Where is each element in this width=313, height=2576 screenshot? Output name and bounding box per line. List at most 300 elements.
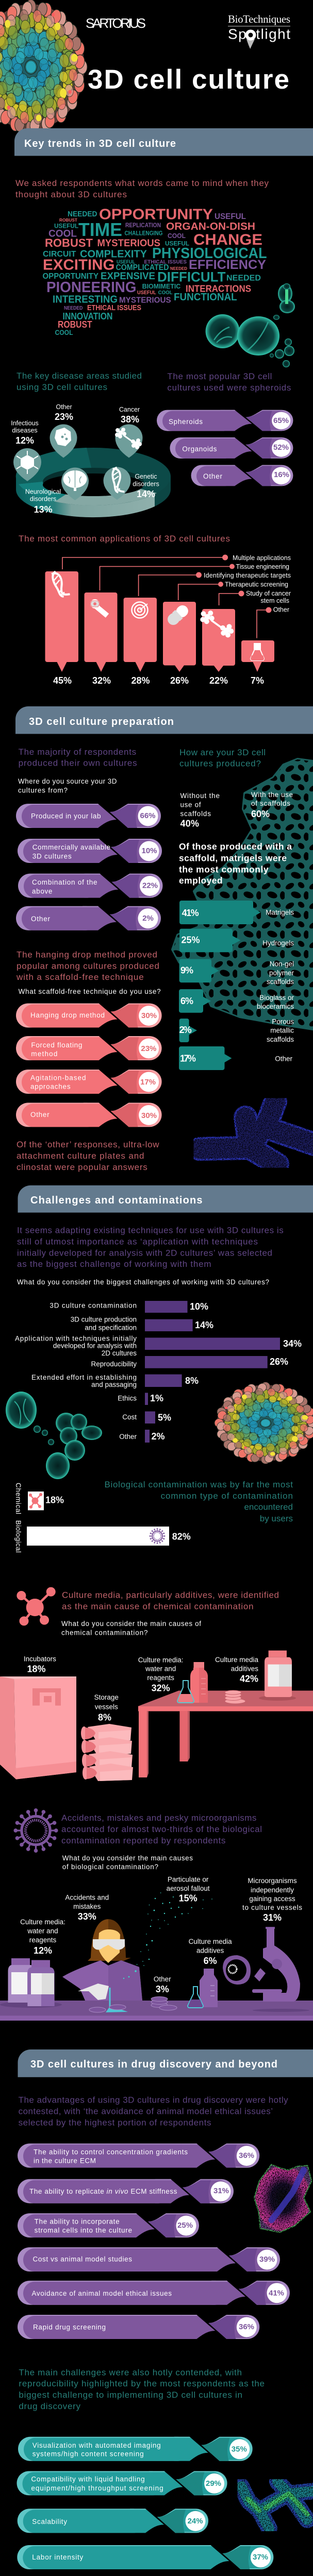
labels: chemical causes: Culture media (215, 1656, 258, 1664)
chart: scaffold materials: scaffolds (267, 1036, 294, 1043)
labels: biological causes: reagents (29, 1936, 57, 1944)
text: without scaffolds: 40% (180, 818, 199, 828)
callout: matrigels (179, 841, 292, 886)
chart: scaffold materials: bioceramics (257, 1003, 294, 1010)
labels: biological causes: Other (154, 1975, 171, 1983)
question: biological causes: What do you consider the main causes (62, 1854, 193, 1862)
chart: scaffold materials: 6% (180, 996, 193, 1006)
labels: 14% (137, 489, 155, 499)
pin: other (50, 425, 77, 457)
bench (138, 1691, 313, 1777)
icon: cancer cells (200, 611, 234, 638)
chart: applications bars: Therapeutic screening (225, 581, 288, 588)
bottle: water and reagents (190, 1662, 208, 1703)
chart: challenges bars: 1% (150, 1393, 163, 1403)
image: teal bubbles left (6, 1392, 102, 1479)
labels: chemical causes: Incubators (24, 1655, 56, 1663)
image: multicoloured spheroid 2 (206, 1375, 313, 1471)
icon: target (132, 602, 147, 618)
labels: biological causes: to culture vessels (242, 1904, 302, 1911)
ribbon: ethical issues: Avoidance of animal model ethical issues (32, 2290, 172, 2297)
section header: drug discovery (18, 2049, 313, 2077)
labels: biological causes: mistakes (73, 1903, 101, 1910)
ribbon: labor: Labor intensity (32, 2553, 84, 2561)
heading: chemical contamination (62, 1590, 279, 1612)
labels: biological causes: additives (196, 1946, 224, 1954)
incubator (0, 1676, 76, 1780)
word cloud: ETHICAL ISSUES (87, 304, 141, 312)
ribbon: hanging drop: Hanging drop method (30, 1011, 105, 1019)
chart: applications bars (45, 554, 291, 686)
heading: biological contamination: by users (260, 1514, 293, 1523)
word cloud (42, 206, 267, 336)
word cloud: CIRCUIT (43, 250, 76, 259)
word cloud: USEFUL (165, 240, 189, 247)
petri dishes (225, 1690, 245, 1704)
word cloud: ETHICAL ISSUES (144, 260, 187, 265)
ribbon: compatibility: 29% (206, 2479, 221, 2488)
word cloud: DIFFICULT (157, 269, 226, 285)
chart: challenges bars: 10% (190, 1301, 208, 1312)
text: other responses: attachment culture plates and (17, 1151, 144, 1161)
text: other responses (17, 1140, 159, 1172)
ribbon: stromal cells: 25% (177, 2221, 193, 2230)
ribbon: concentration gradients: in the culture ECM (34, 2157, 96, 2164)
word cloud: USEFUL (54, 223, 78, 230)
heading: biological causes (61, 1813, 262, 1845)
chart: scaffold materials: 2% (179, 1025, 192, 1035)
word cloud: ROBUST (58, 319, 92, 330)
ribbon: other technique (16, 1103, 162, 1127)
chart: scaffold materials: Matrigels (266, 909, 294, 917)
labels: biological causes: 31% (263, 1912, 282, 1923)
labels: biological causes: Culture media (189, 1938, 232, 1945)
text: other responses: clinostat were popular answers (17, 1162, 147, 1172)
chart: applications bars: Multiple applications (233, 554, 291, 562)
word cloud: REPLICATION (125, 223, 161, 229)
word cloud: INTERESTING (53, 294, 118, 305)
ribbon: forced floating (16, 1036, 162, 1060)
labels: chemical causes: 42% (240, 1674, 258, 1684)
text: without scaffolds: Without the (180, 792, 220, 800)
ribbon: cost (18, 2247, 280, 2272)
chart: scaffold materials: Other (275, 1055, 293, 1063)
word cloud: ROBUST (45, 236, 93, 249)
chart: challenges bars: 2% (152, 1431, 165, 1442)
word cloud: CHANGE (193, 231, 262, 248)
labels: 38% (121, 414, 139, 425)
word cloud: CHALLENGING (125, 230, 163, 236)
chart: challenges bars (15, 1301, 302, 1443)
heading: own cultures (19, 747, 137, 768)
microscope (252, 1927, 309, 2012)
image: blue-green organoid (241, 2482, 313, 2529)
heading: chemical contamination: Culture media, particularly additives, were identified (62, 1590, 279, 1600)
heading: own cultures: produced their own cultures (19, 758, 137, 768)
chart: applications bars: Other (273, 606, 289, 614)
logo: Sartorius: SARTORIUS (86, 15, 146, 31)
heading: own cultures: The majority of respondents (19, 747, 136, 757)
labels: chemical causes (24, 1655, 258, 1722)
labels: chemical causes: Storage (94, 1693, 119, 1701)
text: without scaffolds: scaffolds (180, 810, 211, 818)
ribbon: labor: 37% (253, 2553, 268, 2562)
question: chemical causes (61, 1620, 201, 1636)
ribbon: agitation: Agitation-based (30, 1074, 86, 1082)
paragraph: main challenges: The main challenges were also hotly contended, with (19, 2368, 242, 2377)
heading: disease areas: The key disease areas studied (17, 371, 142, 381)
pin: genetic disorders (103, 466, 133, 500)
paragraph: advantages: contested, with ‘the avoidance of animal model ethical issues’ (19, 2107, 273, 2116)
image: teal scaffold (173, 759, 313, 1029)
labels: 12% (15, 435, 34, 446)
labels: Genetic (135, 473, 157, 480)
icon: dna (45, 570, 76, 599)
labels: biological causes: 3% (156, 1984, 169, 1994)
callout: matrigels: Of those produced with a (179, 841, 292, 852)
section header: challenges (18, 1185, 313, 1213)
word cloud: MYSTERIOUS (97, 238, 160, 249)
ribbon: combination: Combination of the (32, 878, 97, 886)
chart: scaffold materials: Non-gel (270, 960, 294, 968)
text: without scaffolds (180, 792, 220, 828)
chart: challenges bars: Ethics (118, 1394, 137, 1402)
labels: biological causes (20, 1876, 302, 1994)
paragraph: main challenges: biggest challenge to implementing 3D cell cultures in (19, 2390, 242, 2400)
ribbon: stromal cells (18, 2213, 199, 2238)
intro text: word cloud: We asked respondents what words came to mind when they (15, 178, 269, 188)
ribbon: produced in lab: Produced in your lab (31, 812, 101, 820)
chart: scaffold materials: Hydrogels (262, 939, 294, 947)
heading: hanging drop: with a scaffold-free technique (16, 972, 144, 982)
paragraph: adapting techniques: It seems adapting existing techniques for use with 3D cultures is (17, 1226, 284, 1235)
word cloud: COMPLICATED (116, 263, 169, 272)
chart: scaffold materials: 25% (182, 935, 200, 945)
chart: challenges bars: 2D cultures (102, 1349, 137, 1357)
chart: disease areas ring with pins (11, 403, 171, 517)
ribbon: ECM stiffness (18, 2179, 234, 2204)
paragraph: advantages (19, 2095, 288, 2127)
heading: hanging drop: The hanging drop method proved (17, 950, 157, 960)
word cloud: USEFUL (117, 260, 135, 265)
ribbon: commercially available: 3D cultures (32, 852, 72, 860)
word cloud: TIME (78, 219, 122, 240)
callout: matrigels: scaffold, matrigels were (179, 853, 287, 863)
bottle and flask (188, 1969, 218, 2008)
chart: contamination type (14, 1483, 191, 1553)
word cloud: INTERACTIONS (186, 283, 251, 294)
section header: key trends: Key trends in 3D cell culture (24, 138, 176, 149)
word cloud: EXCITING (43, 257, 114, 273)
chart: challenges bars: 5% (158, 1413, 171, 1423)
chart: scaffold materials: 17% (180, 1053, 196, 1063)
word cloud: EXPENSIVE (101, 271, 155, 282)
chart: challenges bars: Extended effort in establishing (31, 1374, 137, 1381)
ribbon: forced floating: Forced floating (31, 1041, 82, 1049)
word cloud: OPPORTUNITY (99, 206, 213, 223)
pin: infectious diseases (13, 448, 41, 481)
contaminant particles (123, 1892, 212, 1979)
heading: biological contamination (104, 1480, 293, 1523)
labels: biological causes: 15% (179, 1893, 197, 1903)
ribbon: commercially available (18, 839, 162, 863)
word cloud: PHYSIOLOGICAL (152, 245, 267, 262)
ribbon: ECM stiffness: The ability to replicate in vivo ECM stiffness (29, 2188, 177, 2195)
labels: chemical causes: 32% (152, 1683, 170, 1693)
icon: pill (166, 603, 190, 628)
chart: applications bars: 26% (170, 675, 189, 686)
bottle: additives (259, 1651, 296, 1701)
chart: applications bars: 7% (251, 675, 264, 686)
labels: biological causes: gaining access (249, 1895, 295, 1903)
petri dishes (89, 1997, 177, 2012)
ribbon: forced floating: method (31, 1050, 57, 1058)
section header: preparation (15, 706, 313, 734)
chart: challenges bars: Application with techniques initially (15, 1335, 137, 1343)
word cloud: USEFUL (137, 290, 156, 296)
word cloud: EFFICIENCY (189, 258, 266, 272)
chart: applications bars: 28% (131, 675, 150, 686)
question: chemical causes: chemical contamination? (61, 1629, 147, 1636)
ribbon: scalability: Scalability (32, 2518, 67, 2526)
heading: how produced: How are your 3D cell (179, 748, 266, 757)
chart: scaffold materials: Porous (272, 1018, 294, 1025)
ribbon: produced in lab: 66% (140, 811, 156, 820)
ribbon: stromal cells: The ability to incorporate (35, 2218, 120, 2226)
chart: applications bars: 22% (209, 675, 228, 686)
labels: 23% (55, 412, 73, 422)
chart: applications bars: stem cells (260, 597, 289, 604)
ribbon: agitation: approaches (30, 1083, 71, 1091)
labels: biological causes: aerosol fallout (167, 1885, 210, 1892)
heading: biological causes: contamination reported by respondents (61, 1836, 225, 1845)
ribbon: scalability: 24% (188, 2517, 203, 2526)
question: source (18, 777, 117, 794)
word cloud: INNOVATION (63, 311, 112, 321)
leader lines (62, 557, 269, 638)
chart: scaffold materials (179, 901, 294, 1070)
ribbon: commercially available: Commercially available (32, 843, 110, 851)
ribbon: produced in lab (16, 804, 161, 828)
pin: neurological disorders (61, 468, 89, 500)
ribbon: cost: Cost vs animal model studies (33, 2256, 132, 2263)
chart: challenges bars: developed for analysis with (53, 1342, 137, 1350)
heading: biological contamination: common type of contamination (161, 1491, 293, 1501)
paragraph: main challenges: reproducibility highlighted by the most respondents as the (19, 2379, 265, 2388)
callout: matrigels: employed (179, 875, 223, 886)
ribbon: labor (17, 2545, 273, 2569)
heading: spheroids (167, 371, 291, 393)
labels: biological causes: 33% (78, 1911, 96, 1922)
labels: chemical causes: vessels (95, 1703, 118, 1710)
heading: disease areas: using 3D cell cultures (17, 382, 107, 392)
word cloud: NEEDED (68, 210, 97, 218)
ribbon: hanging drop (16, 1004, 162, 1027)
ribbon: visualization: Visualization with automated imaging (32, 2442, 161, 2449)
ribbon: organoids: 52% (273, 443, 289, 452)
logo: BioTechniques Spotlight: BioTechniques (228, 13, 290, 25)
ribbon: other: 16% (274, 470, 289, 479)
labels: biological causes: Accidents and (65, 1894, 109, 1902)
illustration: chemical lab scene (0, 1651, 313, 1781)
chart: challenges bars: and passaging (91, 1381, 137, 1388)
word cloud: NEEDED (64, 306, 83, 311)
labels: biological causes: Particulate or (168, 1876, 209, 1884)
labels: chemical causes: 8% (98, 1712, 111, 1722)
ribbon: compatibility (17, 2471, 227, 2495)
illustration: biological lab scene (0, 1892, 313, 2021)
ribbon: spheroids: 65% (273, 416, 289, 425)
paragraph: advantages: The advantages of using 3D cultures in drug discovery were hotly (19, 2095, 288, 2105)
heading: biological contamination: Biological contamination was by far the most (104, 1480, 293, 1489)
labels: diseases (12, 427, 38, 434)
bench (0, 2001, 313, 2021)
image: teal organoid bubbles (206, 283, 295, 367)
word cloud: NEEDED (170, 266, 187, 271)
chart: applications bars: Identifying therapeutic targets (204, 572, 291, 579)
text: with scaffolds (251, 791, 293, 819)
text: without scaffolds: use of (180, 801, 201, 809)
ribbon: organoids: Organoids (182, 445, 217, 453)
labels: biological causes: Microorganisms (248, 1877, 297, 1885)
chart: applications bars: 32% (92, 675, 111, 686)
word cloud: COOL (168, 232, 186, 240)
labels (11, 403, 159, 515)
ribbon: visualization: systems/high content screening (32, 2450, 144, 2458)
chart: challenges bars: 14% (195, 1320, 213, 1330)
chart: challenges bars: Reproducibility (91, 1360, 137, 1368)
ribbon: concentration gradients: 36% (239, 2151, 254, 2160)
chart: applications bars: Study of cancer (246, 590, 291, 597)
chart: scaffold materials: scaffolds (267, 978, 294, 986)
title: 3D cell culture (88, 64, 289, 95)
icon: wrench (90, 599, 107, 616)
text: with scaffolds: With the use (251, 791, 293, 799)
logo: BioTechniques Spotlight (228, 13, 290, 49)
heading: spheroids: cultures used were spheroids (167, 383, 291, 393)
ribbon: combination: 22% (142, 882, 158, 890)
chart: challenges bars: 26% (270, 1357, 288, 1367)
ribbon: scalability (18, 2509, 208, 2533)
section header: challenges: Challenges and contaminations (30, 1195, 202, 1206)
word cloud: OPPORTUNITY (42, 272, 99, 281)
paragraph: advantages: selected by the highest portion of respondents (19, 2117, 211, 2127)
bottles (0, 1958, 62, 2008)
heading: disease areas (17, 371, 142, 392)
ribbon: stromal cells: stromal cells into the culture (35, 2226, 132, 2234)
labels: disorders (133, 481, 159, 488)
chart: scaffold materials: 41% (182, 908, 199, 918)
labels: Cancer (119, 406, 140, 413)
labels: Infectious (11, 419, 39, 427)
word cloud: COOL (55, 329, 73, 336)
question: chemical causes: What do you consider the main causes of (61, 1620, 201, 1628)
ribbon: compatibility: Compatibility with liquid handling (31, 2476, 145, 2483)
chart: challenges bars: 3D culture production (71, 1316, 137, 1323)
word cloud: NEEDED (226, 274, 261, 282)
section header: key trends (14, 128, 313, 156)
labels: Neurological (25, 488, 61, 496)
ribbon: visualization: 35% (232, 2445, 247, 2453)
ribbon: other technique: 30% (141, 1111, 157, 1120)
intro text: word cloud: thought about 3D cultures (15, 190, 127, 199)
ribbon: concentration gradients (18, 2143, 259, 2168)
logo: BioTechniques Spotlight: Spotlight (228, 26, 290, 42)
paragraph: main challenges: drug discovery (19, 2401, 80, 2411)
heading: spheroids: The most popular 3D cell (167, 371, 272, 381)
ribbon: spheroids (157, 410, 293, 431)
chart: scaffold materials: polymer (269, 969, 294, 977)
ribbon: agitation: 17% (140, 1078, 156, 1087)
pin: cancer (115, 425, 142, 457)
question: biological causes (62, 1854, 193, 1871)
chart: contamination type: 18% (45, 1495, 64, 1505)
icon: virus (13, 1808, 58, 1853)
callout: matrigels: the most commonly (179, 865, 269, 875)
heading: how produced (179, 748, 266, 769)
chart: applications bars: Tissue engineering (236, 563, 289, 570)
heading: biological causes: accounted for almost two-thirds of the biological (61, 1824, 262, 1834)
intro text: word cloud (15, 178, 269, 199)
ribbon: organoids (170, 437, 293, 459)
heading: hanging drop (16, 950, 159, 982)
labels: biological causes: independently (251, 1886, 294, 1894)
ribbon: commercially available: 10% (141, 846, 157, 855)
chart: challenges bars: 3D culture contamination (50, 1301, 137, 1310)
ribbon: rapid screening: 36% (239, 2323, 254, 2331)
text: with scaffolds: of scaffolds (251, 800, 290, 807)
chart: scaffold materials: 9% (180, 965, 193, 976)
paragraph: adapting techniques: as the biggest challenge of working with them (17, 1259, 211, 1269)
chart: scaffold materials: Bioglass or (259, 994, 294, 1002)
word cloud: USEFUL (215, 212, 246, 221)
word cloud: COOL (48, 229, 77, 239)
chart: contamination type: 82% (172, 1531, 191, 1541)
question: biological causes: of biological contamination? (62, 1863, 158, 1871)
chart: challenges bars: 8% (185, 1376, 199, 1386)
labels: biological causes: water and (27, 1927, 58, 1935)
labels: biological causes: Culture media: (20, 1918, 65, 1926)
ribbon: compatibility: equipment/high throughput screening (31, 2484, 163, 2492)
ribbon: cost: 39% (259, 2255, 275, 2264)
section header: drug discovery: 3D cell cultures in drug discovery and beyond (30, 2059, 277, 2070)
word cloud: ROBUST (59, 217, 78, 223)
ribbon: rapid screening: Rapid drug screening (33, 2324, 106, 2331)
image: blue organoid (200, 1101, 313, 1164)
ribbon: ECM stiffness: 31% (213, 2187, 229, 2195)
heading: hanging drop: popular among cultures produced (17, 961, 159, 971)
labels: 13% (34, 504, 53, 515)
word cloud: MYSTERIOUS (119, 296, 171, 305)
ribbon: concentration gradients: The ability to control concentration gradients (34, 2148, 188, 2156)
ribbon: other (191, 465, 293, 486)
storage flasks (81, 1724, 133, 1781)
paragraph: adapting techniques: still of utmost importance as ‘application with techniques (17, 1236, 258, 1246)
question: scaffold-free: What scaffold-free technique do you use? (19, 988, 161, 995)
labels: chemical causes: 18% (27, 1664, 46, 1674)
heading: applications: The most common applications of 3D cell cultures (19, 534, 230, 544)
ribbon: combination: above (32, 887, 52, 895)
ribbon: ethical issues: 41% (269, 2289, 284, 2297)
ribbon: visualization (18, 2437, 253, 2461)
flask (177, 1681, 194, 1703)
ribbon: other source (16, 906, 161, 930)
chart: challenges bars: Cost (122, 1413, 137, 1421)
ribbon: other source: 2% (142, 914, 154, 923)
question: source: cultures from? (18, 786, 68, 794)
ribbon: agitation (16, 1070, 162, 1094)
labels: biological causes: 6% (204, 1956, 217, 1966)
